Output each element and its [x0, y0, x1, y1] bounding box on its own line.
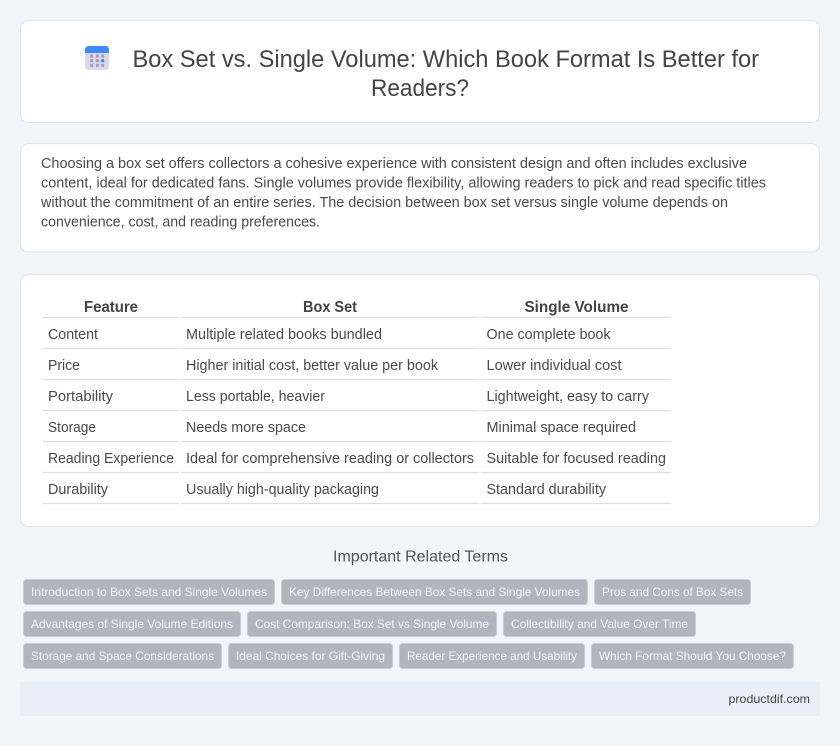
- text block: introduction paragraph: convenience, cost, and reading preferences.: [41, 214, 320, 230]
- table header: Feature: [84, 299, 138, 316]
- related term chips: Collectibility and Value Over Time: [511, 617, 688, 631]
- text block: introduction paragraph: Choosing a box set offers collectors a cohesive experience with consistent design and often includes exclusive: [41, 156, 747, 172]
- related term chips: Pros and Cons of Box Sets: [602, 585, 743, 599]
- panel: header: [20, 20, 820, 122]
- table header: [84, 299, 629, 316]
- table row: reading experience: [48, 451, 666, 467]
- table row: durability: Durability: [48, 482, 109, 498]
- table row: storage: [48, 420, 636, 436]
- table row: portability: Lightweight, easy to carry: [486, 389, 650, 405]
- table row: reading experience: Suitable for focused reading: [486, 451, 666, 467]
- related term chips: Storage and Space Considerations: [31, 649, 214, 663]
- title: Readers?: [371, 75, 469, 102]
- related term chips: Introduction to Box Sets and Single Volumes: [31, 585, 267, 599]
- panel: introduction: [20, 144, 820, 252]
- table row: price: Higher initial cost, better value per book: [186, 358, 439, 374]
- panel: comparison table: [20, 274, 820, 526]
- text block: introduction paragraph: [40, 156, 766, 230]
- table row: durability: Usually high-quality packaging: [186, 482, 379, 498]
- related term chips: [24, 580, 794, 668]
- table row: price: Price: [48, 358, 80, 374]
- heading: important related terms: Important Related Terms: [333, 548, 508, 566]
- table row: storage: Minimal space required: [486, 420, 636, 436]
- related term chips: Cost Comparison: Box Set vs Single Volume: [255, 617, 489, 631]
- related term chips: Ideal Choices for Gift-Giving: [236, 649, 385, 663]
- title: Box Set vs. Single Volume: Which Book Format Is Better for: [132, 46, 759, 73]
- table row: durability: Standard durability: [486, 482, 607, 498]
- table row: portability: Less portable, heavier: [186, 389, 325, 405]
- table row: content: [48, 327, 611, 343]
- related term chips: Key Differences Between Box Sets and Single Volumes: [289, 585, 580, 599]
- footer: [20, 682, 820, 716]
- table row: reading experience: Reading Experience: [48, 451, 174, 467]
- table row: portability: [48, 389, 650, 405]
- table row: portability: Portability: [48, 389, 114, 405]
- table row: content: One complete book: [486, 327, 611, 343]
- related term chips: Which Format Should You Choose?: [599, 649, 786, 663]
- table row: price: Lower individual cost: [486, 358, 622, 374]
- table header: Box Set: [303, 299, 358, 316]
- table row: storage: Needs more space: [186, 420, 306, 436]
- table header: Single Volume: [524, 299, 629, 316]
- text block: introduction paragraph: content, ideal for dedicated fans. Single volumes provide flexibility, allowing readers to pick and read specific titles: [41, 176, 766, 192]
- table row: storage: Storage: [48, 420, 96, 436]
- related term chips: Reader Experience and Usability: [407, 649, 577, 663]
- table row: reading experience: Ideal for comprehensive reading or collectors: [186, 451, 474, 467]
- footer: productdif.com: [728, 692, 810, 706]
- table row: content: Multiple related books bundled: [186, 327, 382, 343]
- icon: calendar: [85, 46, 109, 70]
- table row: price: [48, 358, 622, 374]
- title: [132, 46, 759, 102]
- text block: introduction paragraph: without the commitment of an entire series. The decision between box set versus single volume depends on: [40, 195, 728, 211]
- table row: content: Content: [48, 327, 98, 343]
- related term chips: Advantages of Single Volume Editions: [31, 617, 233, 631]
- table row: durability: [48, 482, 607, 498]
